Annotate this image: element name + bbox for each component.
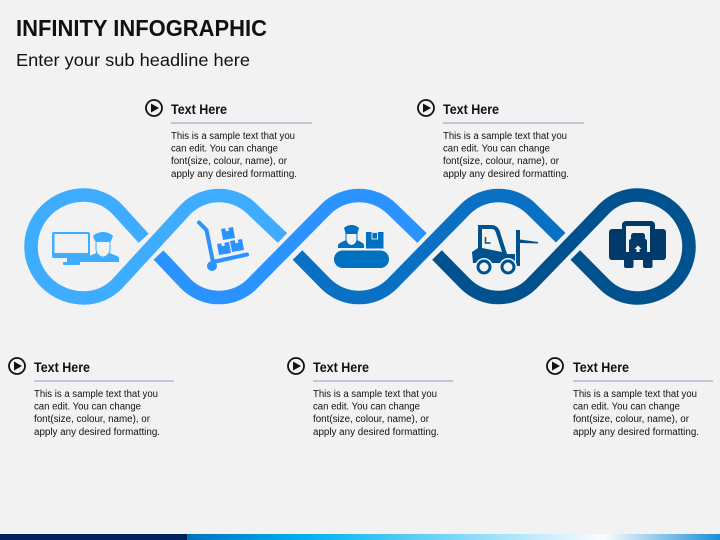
body text 2: can edit. You can change [443,144,550,154]
body text 4: can edit. You can change [313,402,420,412]
body text 4 [313,389,439,438]
body text 4: font(size, colour, name), or [313,414,430,425]
heading 3: Text Here [34,360,90,375]
infinity chain [31,195,689,298]
body text 2 [443,131,569,180]
heading 4: Text Here [313,360,369,375]
body text 5 [573,389,699,438]
icon: forklift [472,225,538,276]
icon: guard and conveyor [334,225,389,268]
body text 1: can edit. You can change [171,144,278,154]
body text 4: This is a sample text that you [313,389,437,400]
panel: text block 5 [547,358,713,438]
body text 2: apply any desired formatting. [443,169,569,180]
heading 1: Text Here [171,102,227,117]
panel: text block 1 [146,100,312,180]
icon: hand truck with boxes [199,222,247,271]
body text 1: font(size, colour, name), or [171,156,288,167]
icon: play button 2 [418,100,434,116]
panel: text block 2 [418,100,584,180]
body text 2: This is a sample text that you [443,131,567,142]
panel: text block 4 [288,358,453,438]
body text 3: font(size, colour, name), or [34,414,151,425]
strand 3 [298,195,561,298]
icon: security scanner [609,221,666,268]
icon: play button 3 [9,358,25,374]
body text 1: apply any desired formatting. [171,169,297,180]
body text 5: This is a sample text that you [573,389,697,400]
strand 4 [437,195,689,298]
body text 5: can edit. You can change [573,402,680,412]
body text 3: apply any desired formatting. [34,427,160,438]
icon: monitor and guard [52,232,119,265]
title: INFINITY INFOGRAPHIC [16,15,267,41]
subtitle: Enter your sub headline here [16,50,250,70]
body text 2: font(size, colour, name), or [443,156,560,167]
icon: play button 5 [547,358,563,374]
body text 5: font(size, colour, name), or [573,414,690,425]
icon: play button 4 [288,358,304,374]
strand 1 [31,195,282,298]
body text 3 [34,389,160,438]
footer bar [0,534,720,540]
heading 2: Text Here [443,102,499,117]
panel: text block 3 [9,358,174,438]
strand 2 [158,195,422,298]
body text 3: This is a sample text that you [34,389,158,400]
body text 4: apply any desired formatting. [313,427,439,438]
icon: play button 1 [146,100,162,116]
body text 5: apply any desired formatting. [573,427,699,438]
body text 1: This is a sample text that you [171,131,295,142]
heading 5: Text Here [573,360,629,375]
body text 1 [171,131,297,180]
body text 3: can edit. You can change [34,402,141,412]
